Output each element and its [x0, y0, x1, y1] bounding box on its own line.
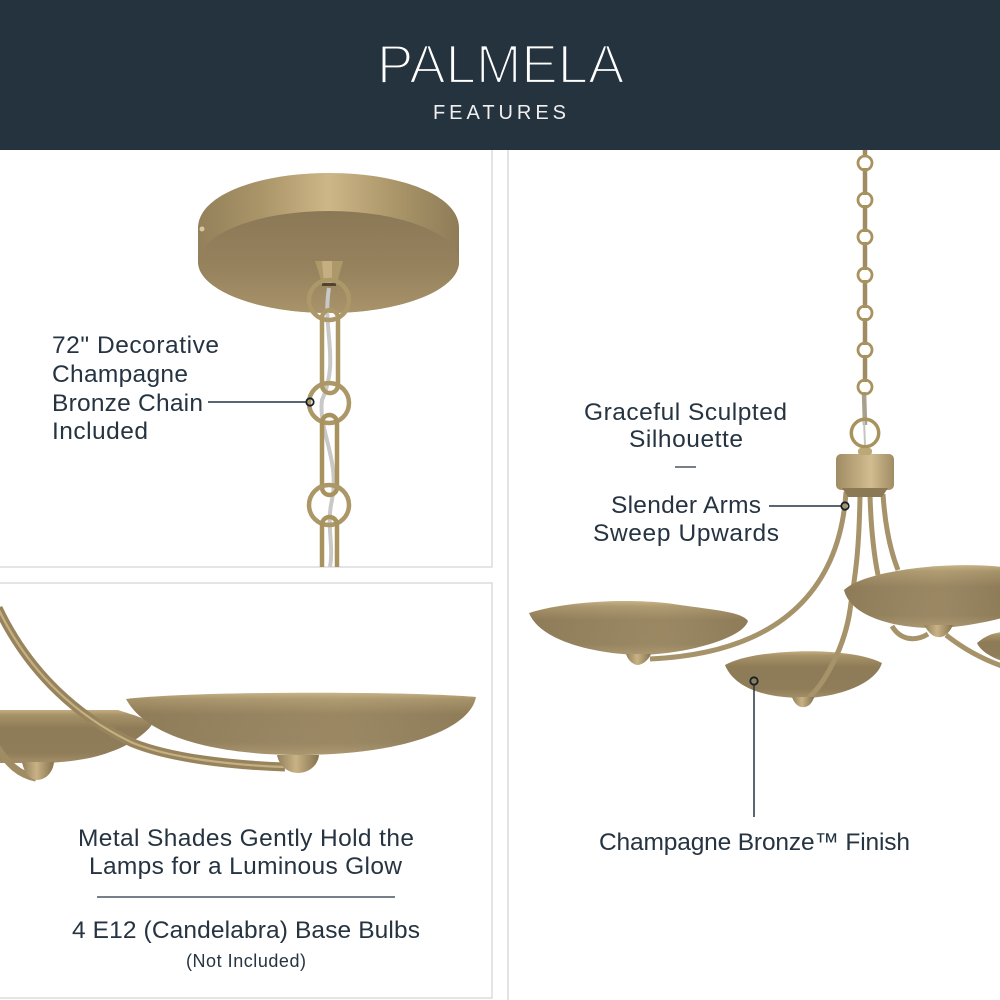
callout: graceful silhouette and slender arms: Graceful Sculpted [584, 399, 787, 426]
canopy [198, 173, 459, 313]
callout: champagne bronze finish [599, 677, 910, 856]
panel: shade detail [0, 583, 492, 998]
subtitle: FEATURES: FEATURES [433, 102, 566, 124]
text: shades and lamps: Lamps for a Luminous Glow [89, 853, 402, 880]
callout: graceful silhouette and slender arms: Slender Arms [611, 492, 761, 519]
shades [529, 565, 1000, 707]
hub [836, 448, 894, 497]
chain and canopy drawing [198, 173, 459, 597]
text: shades and lamps [72, 825, 420, 971]
text: shades and lamps: (Not Included) [186, 951, 306, 971]
shade and arm close-up [0, 608, 476, 780]
chain with cord [309, 261, 349, 597]
text: shades and lamps: 4 E12 (Candelabra) Base Bulbs [72, 917, 420, 944]
header band [0, 0, 1000, 150]
callout: decorative chain [52, 332, 314, 445]
callout: graceful silhouette and slender arms: Silhouette [629, 426, 743, 453]
callout: graceful silhouette and slender arms [584, 399, 849, 547]
callout: decorative chain: Champagne [52, 361, 188, 388]
callout: decorative chain: Bronze Chain [52, 390, 203, 417]
arms [650, 492, 1000, 703]
callout: decorative chain: Included [52, 418, 148, 445]
fixture drawing [529, 150, 1000, 707]
panel: full fixture [508, 148, 1000, 1000]
hanging chain [851, 150, 879, 447]
callout: decorative chain: 72" Decorative [52, 332, 219, 359]
title: PALMELA: PALMELA [377, 34, 625, 95]
panel: chain detail [0, 148, 492, 597]
callout: graceful silhouette and slender arms: Sweep Upwards [593, 520, 779, 547]
callout: champagne bronze finish: Champagne Bronze™ Finish [599, 829, 910, 856]
text: shades and lamps: Metal Shades Gently Hold the [78, 825, 414, 852]
